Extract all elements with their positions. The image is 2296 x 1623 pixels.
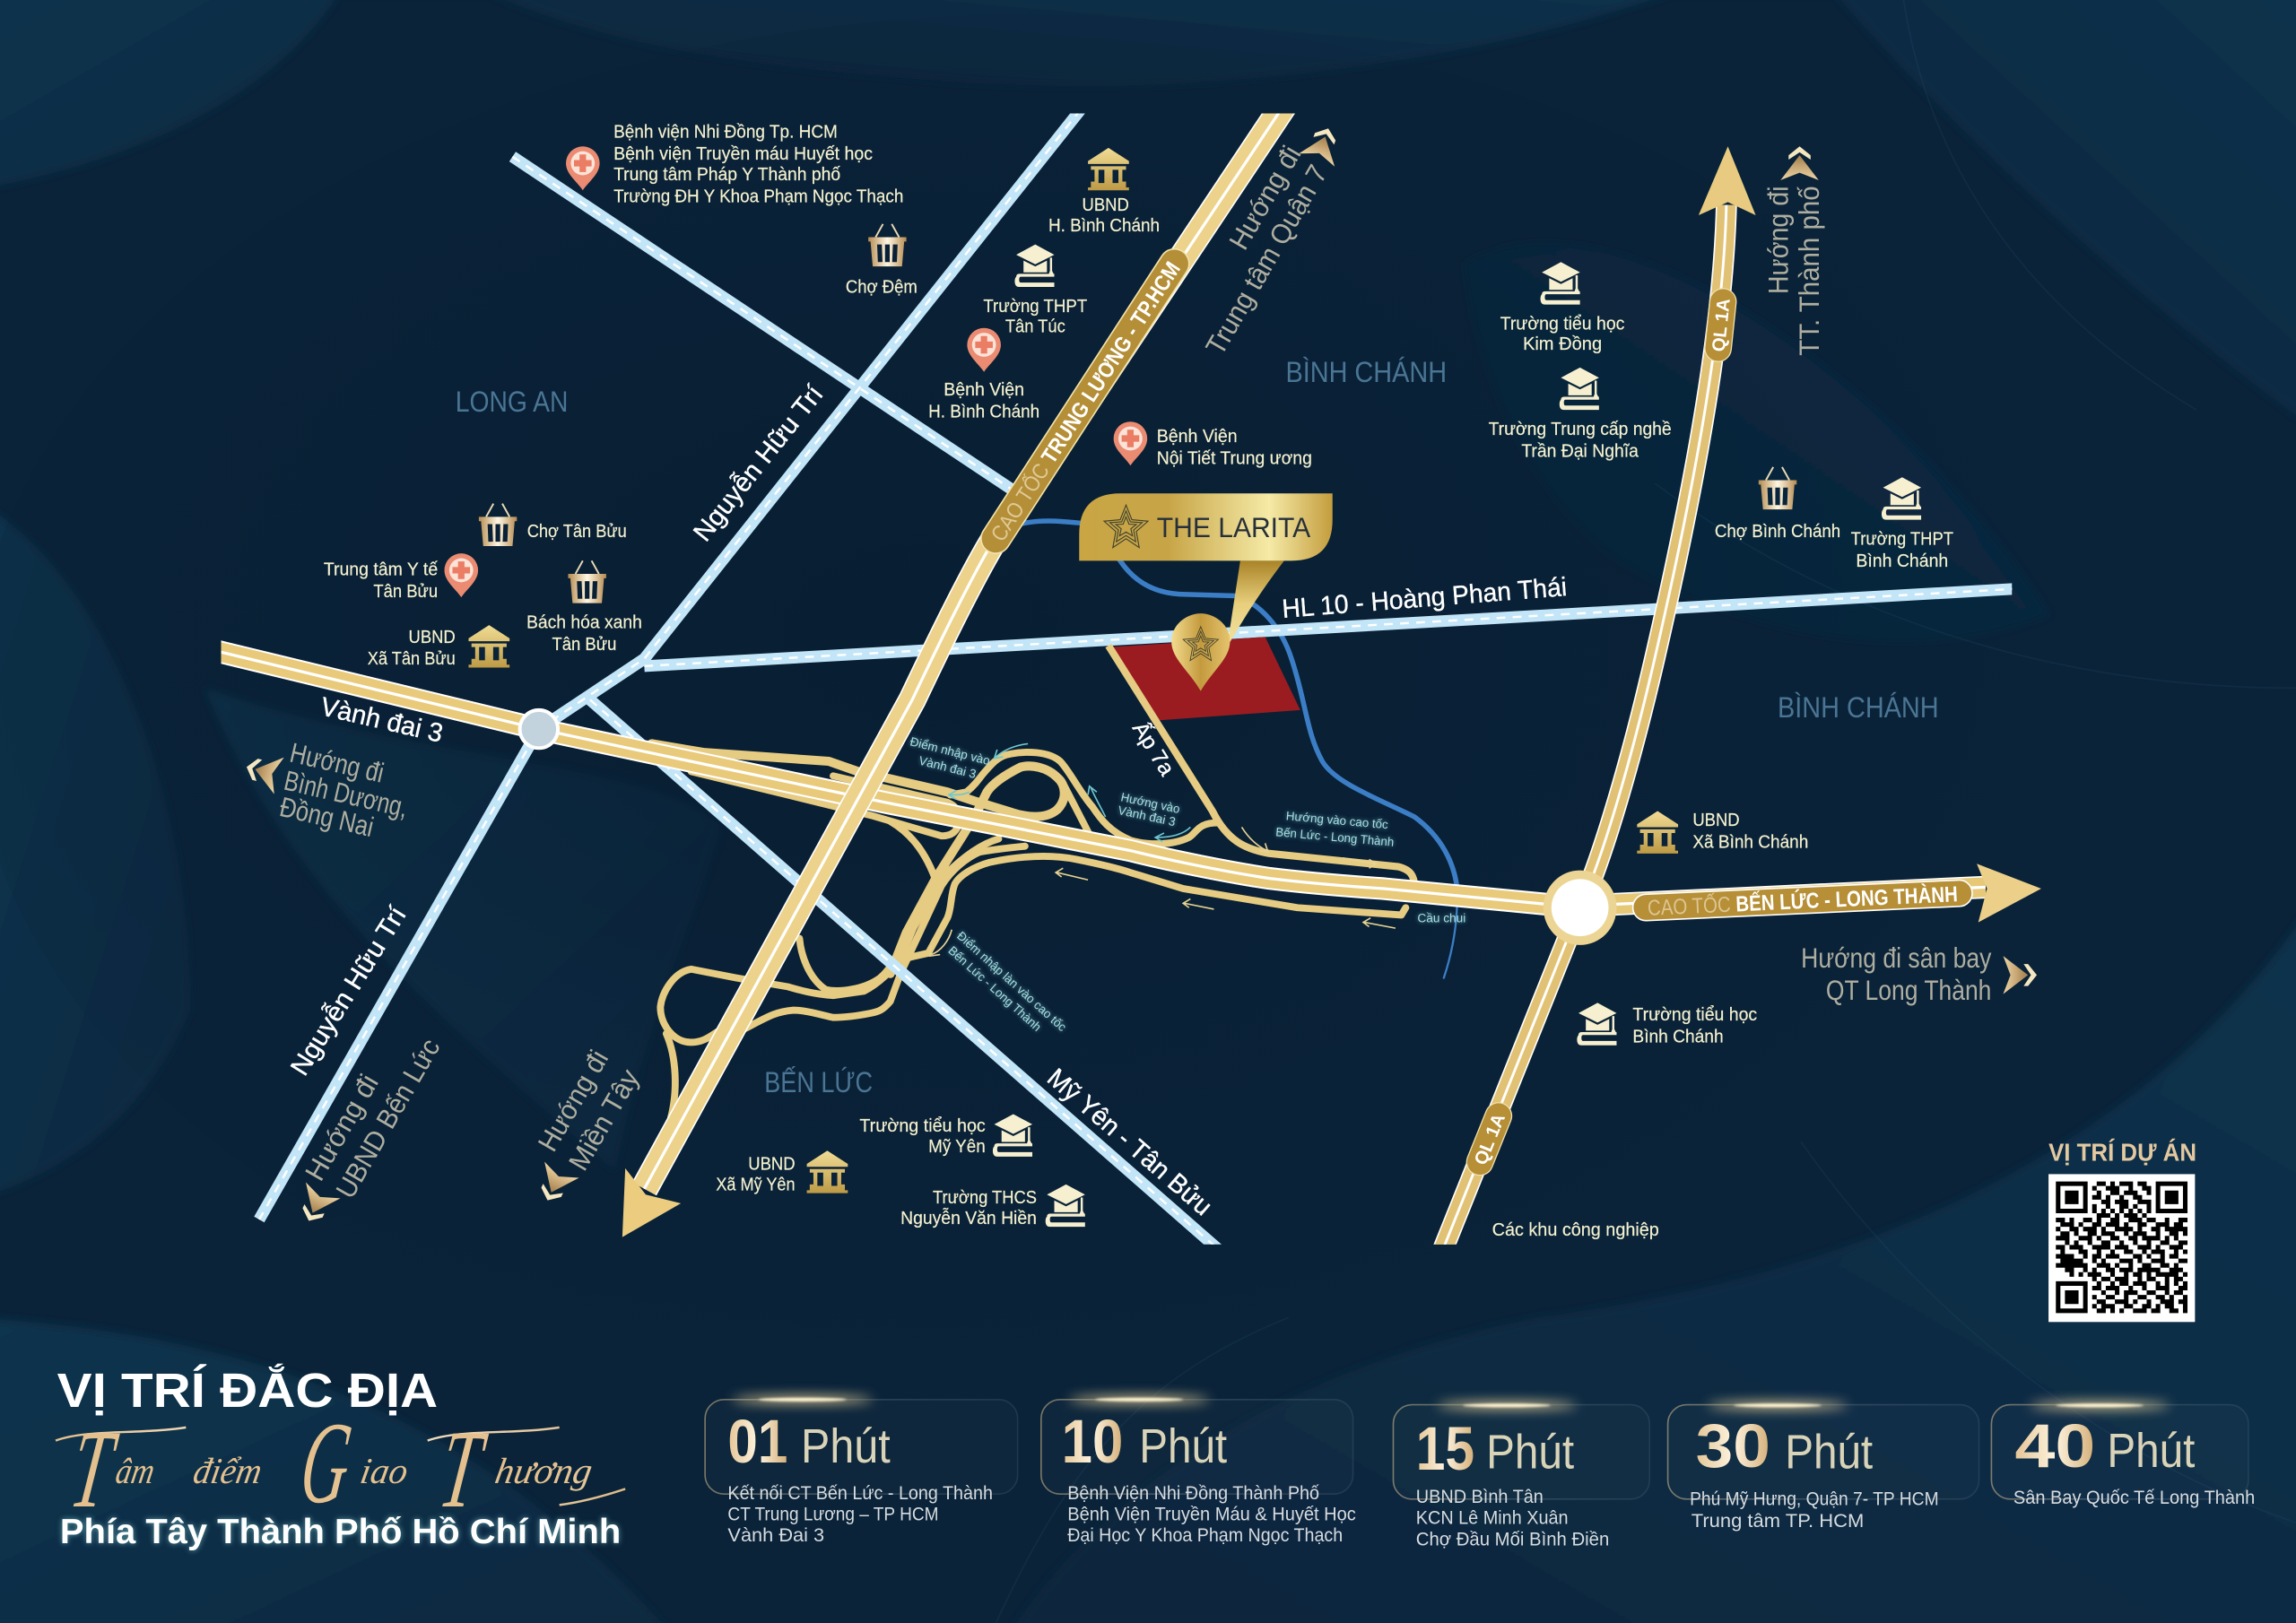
card: 10 Phút: Bệnh Viện Nhi Đồng Thành Phố [1067, 1483, 1319, 1504]
direction: UBND Bến Lức [291, 1033, 446, 1228]
script heading: Tâm điểm Giao Thương: hương [492, 1451, 596, 1491]
poi: Trường tiểu học Bình Chánh: Trường tiểu học [1632, 1005, 1757, 1025]
capsule: QL 1A bottom [1463, 1098, 1516, 1179]
poi: Bệnh Viện Nội Tiết Trung ương: Bệnh Viện [1157, 427, 1238, 447]
direction: sân bay QT Long Thành [1801, 942, 2037, 1006]
junction: Vành đai 3 and Nguyễn Hữu Trí [520, 710, 558, 748]
direction: TT. Thành phố: TT. Thành phố [1794, 186, 1825, 356]
highway: Bến Lức - Long Thành [1604, 887, 1986, 905]
flow arrows [930, 743, 1396, 956]
direction: Miền Tây [530, 1045, 646, 1209]
teal flow labels: Hướng vào cao tốc [1285, 809, 1389, 831]
direction: UBND Bến Lức: UBND Bến Lức [330, 1033, 446, 1203]
card: 10 Phút: Bệnh Viện Truyền Máu & Huyết Học [1067, 1505, 1356, 1525]
callout: The Larita: THE LARITA [1157, 512, 1311, 543]
poi: UBND Xã Bình Chánh [1637, 811, 1808, 854]
poi: Bệnh viện Nhi Đồng group [566, 122, 903, 206]
QR block: Vị trí dự án: VỊ TRÍ DỰ ÁN [2048, 1139, 2196, 1167]
location pin [1171, 613, 1230, 691]
poi: Bệnh viện Nhi Đồng group: Trung tâm Pháp Y Thành phố [613, 165, 840, 185]
direction: TT. Thành phố: Hướng đi [1762, 186, 1794, 294]
road labels: Ấp 7a [1127, 717, 1180, 780]
red project plot [1111, 637, 1300, 720]
poi: UBND Xã Mỹ Yên [716, 1150, 848, 1194]
card: 10 Phút: Phút [1139, 1419, 1227, 1473]
heading: Vị trí đắc địa: VỊ TRÍ ĐẮC ĐỊA [57, 1363, 438, 1418]
poi: Bệnh Viện Nội Tiết Trung ương: Nội Tiết Trung ương [1157, 449, 1312, 469]
card: 15 Phút: Chợ Đầu Mối Bình Điền [1416, 1529, 1609, 1549]
teal flow labels [909, 734, 1465, 1034]
direction: Trung tâm Quận 7: Hướng đi [1223, 141, 1307, 255]
poi: Trường THCS Nguyễn Văn Hiền: Trường THCS [933, 1188, 1037, 1208]
poi: Chợ Tân Bửu [479, 504, 627, 546]
poi: Bệnh Viện Nội Tiết Trung ương [1114, 421, 1312, 469]
poi: Trường tiểu học Mỹ Yên: Trường tiểu học [859, 1116, 986, 1136]
poi: Trường THPT Tân Túc [983, 245, 1087, 337]
region labels: BÌNH CHÁNH [1285, 355, 1447, 388]
highway: QL 1A [1438, 205, 1726, 1262]
poi: Trường THPT Bình Chánh: Bình Chánh [1856, 551, 1948, 571]
poi: Chợ Tân Bửu: Chợ Tân Bửu [527, 522, 627, 542]
card: 10 Phút: 10 [1062, 1407, 1123, 1476]
direction: Bình Dương, Đồng Nai [241, 737, 411, 843]
poi: Trường Trung cấp nghề Trần Đại Nghĩa [1489, 368, 1672, 461]
card: 30 Phút: Trung tâm TP. HCM [1692, 1511, 1864, 1532]
poi: UBND H. Bình Chánh: UBND [1083, 195, 1129, 215]
poi: Trung tâm Y tế Tân Bửu [324, 553, 478, 602]
capsule: QL 1A top [1703, 287, 1737, 363]
highway: Cao tốc Trung Lương - TP.HCM [644, 85, 1298, 1189]
teal flow labels: Cầu chui [1417, 912, 1465, 925]
poi: UBND Xã Tân Bửu: Xã Tân Bửu [368, 649, 456, 669]
teal flow labels: Vành đai 3 [918, 754, 978, 781]
poi: Bệnh viện Nhi Đồng group: Bệnh viện Nhi Đồng Tp. HCM [613, 122, 838, 142]
region labels [456, 355, 1939, 1098]
teal flow labels: Vành đai 3 [1117, 803, 1177, 829]
direction: TT. Thành phố [1762, 146, 1825, 356]
script heading: Tâm điểm Giao Thương: iao [357, 1450, 412, 1491]
poi: Trường THPT Tân Túc: Trường THPT [983, 297, 1087, 317]
script heading: Tâm điểm Giao Thương: T [64, 1408, 124, 1531]
script heading: Tâm điểm Giao Thương: âm [113, 1452, 158, 1492]
road labels: HL 10 - Hoàng Phan Thái [1281, 572, 1568, 624]
capsule: QL 1A bottom: QL 1A [1471, 1111, 1509, 1168]
card: 01 Phút: Phút [801, 1419, 891, 1473]
poi: Chợ Đệm: Chợ Đệm [846, 278, 918, 298]
poi: UBND Xã Mỹ Yên: Xã Mỹ Yên [716, 1175, 796, 1194]
card: 40 Phút: 40 [2015, 1411, 2095, 1480]
direction: Miền Tây: Miền Tây [562, 1063, 646, 1176]
card: 01 Phút: Kết nối CT Bến Lức - Long Thành [727, 1483, 993, 1504]
interchange ramps [652, 743, 1405, 1118]
poi: Trung tâm Y tế Tân Bửu: Trung tâm Y tế [324, 560, 439, 580]
poi: Trường THCS Nguyễn Văn Hiền [900, 1185, 1085, 1228]
road labels: Nguyễn Hữu Trí [688, 379, 830, 547]
capsule: QL 1A top: QL 1A [1709, 298, 1735, 352]
poi: Trường THPT Bình Chánh: Trường THPT [1851, 529, 1953, 549]
poi: UBND Xã Tân Bửu [368, 625, 509, 669]
poi: Trường tiểu học Mỹ Yên: Mỹ Yên [928, 1137, 986, 1157]
card: 40 Phút: Sân Bay Quốc Tế Long Thành [2013, 1488, 2255, 1508]
road labels: Mỹ Yên - Tân Bửu [1041, 1063, 1218, 1221]
teal flow labels: Hướng vào [1119, 790, 1181, 816]
arrowhead: Trung Lương [622, 1168, 681, 1237]
poi: Chợ Đệm [846, 224, 918, 298]
direction: Bình Dương, Đồng Nai: Hướng đi [287, 737, 387, 789]
teal flow labels: Bến Lức - Long Thành [1275, 825, 1395, 849]
poi: Bệnh viện Nhi Đồng group: Trường ĐH Y Khoa Phạm Ngọc Thạch [613, 187, 903, 206]
direction: Miền Tây: Hướng đi [532, 1045, 614, 1157]
road labels: Nguyễn Hữu Trí [285, 900, 413, 1081]
road: Áp 7a [1109, 646, 1414, 887]
road labels: Vành đai 3 [317, 691, 446, 749]
road labels [285, 379, 1568, 1221]
card: 30 Phút: Phú Mỹ Hưng, Quận 7- TP HCM [1690, 1488, 1939, 1509]
region labels: BẾN LỨC [764, 1065, 873, 1098]
card: 30 Phút: 30 [1696, 1411, 1770, 1480]
poi: Bệnh viện Nhi Đồng group: Bệnh viện Truyền máu Huyết học [613, 144, 873, 164]
poi: Trường THPT Tân Túc: Tân Túc [1005, 317, 1065, 337]
card: 01 Phút: Vành Đai 3 [727, 1525, 824, 1546]
region labels: LONG AN [456, 385, 568, 418]
poi: Trường tiểu học Mỹ Yên [859, 1114, 1032, 1157]
card: 40 Phút [1991, 1402, 2255, 1508]
card: 40 Phút: Phút [2107, 1424, 2195, 1478]
poi: UBND Xã Tân Bửu: UBND [409, 628, 456, 647]
script heading: Tâm điểm Giao Thương [56, 1397, 625, 1531]
arrowhead: Bến Lức - Long Thành [1977, 864, 2041, 923]
arrowhead: QL 1A [1699, 146, 1756, 215]
card: 01 Phút [705, 1396, 1018, 1546]
label: Các khu công nghiệp: Các khu công nghiệp [1492, 1220, 1659, 1240]
poi: Trường tiểu học Kim Đồng: Trường tiểu học [1500, 314, 1624, 334]
poi: Trường tiểu học Bình Chánh [1577, 1002, 1757, 1046]
callout: The Larita [1079, 493, 1333, 647]
region labels: BÌNH CHÁNH [1778, 690, 1939, 724]
blue roads [259, 97, 2021, 1254]
poi: UBND Xã Mỹ Yên: UBND [748, 1155, 796, 1175]
card: 15 Phút: KCN Lê Minh Xuân [1416, 1508, 1569, 1529]
junction: QL 1A and Bến Lức [1544, 871, 1616, 945]
card: 15 Phút: 15 [1416, 1414, 1474, 1483]
direction: UBND Bến Lức: Hướng đi [299, 1069, 385, 1186]
card: 15 Phút: Phút [1486, 1426, 1574, 1480]
teal flow labels: Bến Lức - Long Thành [945, 943, 1044, 1034]
direction: Trung tâm Quận 7: Trung tâm Quận 7 [1199, 160, 1334, 360]
QR block: Vị trí dự án [2048, 1139, 2196, 1322]
poi: Trung tâm Y tế Tân Bửu: Tân Bửu [373, 582, 438, 602]
poi: Trường Trung cấp nghề Trần Đại Nghĩa: Trần Đại Nghĩa [1521, 441, 1639, 461]
teal flow labels: Điểm nhập vào [909, 734, 992, 768]
poi: Trường THPT Bình Chánh [1851, 477, 1953, 571]
poi: UBND H. Bình Chánh [1048, 148, 1160, 236]
card: 30 Phút: Phút [1785, 1426, 1873, 1480]
poi: Bệnh Viện H. Bình Chánh [928, 328, 1039, 421]
capsule: Cao tốc Bến Lức - Long Thành: CAO TỐC BẾN LỨC - LONG THÀNH [1647, 881, 1958, 921]
poi: UBND Xã Bình Chánh: Xã Bình Chánh [1692, 832, 1808, 852]
capsule: Cao tốc Trung Lương - TP.HCM: CAO TỐC TRUNG LƯƠNG - TP.HCM [986, 257, 1186, 546]
poi: Bệnh Viện H. Bình Chánh: H. Bình Chánh [928, 402, 1039, 421]
poi: Trường tiểu học Bình Chánh: Bình Chánh [1632, 1027, 1724, 1046]
script heading: Tâm điểm Giao Thương: G [293, 1397, 359, 1527]
card: 10 Phút: Đại Học Y Khoa Phạm Ngọc Thạch [1067, 1525, 1343, 1546]
poi: Trường Trung cấp nghề Trần Đại Nghĩa: Trường Trung cấp nghề [1489, 420, 1672, 439]
direction: sân bay QT Long Thành: QT Long Thành [1826, 975, 1991, 1006]
highway: Vành đai 3 [213, 650, 1552, 905]
card: 10 Phút [1041, 1396, 1356, 1546]
card: 30 Phút [1668, 1402, 1979, 1532]
direction: Bình Dương, Đồng Nai: Bình Dương, [282, 765, 411, 823]
poi: Chợ Bình Chánh [1715, 467, 1840, 542]
subheading: Phía Tây Thành Phố Hồ Chí Minh: Phía Tây Thành Phố Hồ Chí Minh [60, 1513, 621, 1551]
direction: sân bay QT Long Thành: Hướng đi sân bay [1801, 942, 1992, 974]
poi: Chợ Bình Chánh: Chợ Bình Chánh [1715, 522, 1840, 542]
direction: Bình Dương, Đồng Nai: Đồng Nai [277, 791, 377, 843]
poi: Trường tiểu học Kim Đồng: Kim Đồng [1523, 334, 1602, 354]
poi: Bách hóa xanh Tân Bửu [526, 560, 642, 655]
script heading: Tâm điểm Giao Thương: T [433, 1408, 492, 1531]
river [1013, 521, 1457, 978]
card: 01 Phút: 01 [727, 1407, 787, 1476]
teal flow labels: Điểm nhập làn vào cao tốc [954, 929, 1069, 1034]
card: 15 Phút: UBND Bình Tân [1416, 1487, 1544, 1507]
poi: Bách hóa xanh Tân Bửu: Bách hóa xanh [526, 612, 642, 632]
card: 01 Phút: CT Trung Lương – TP HCM [727, 1505, 939, 1525]
script heading: Tâm điểm Giao Thương: điểm [190, 1450, 265, 1491]
poi: UBND Xã Bình Chánh: UBND [1692, 811, 1740, 830]
poi: Trường THCS Nguyễn Văn Hiền: Nguyễn Văn Hiền [900, 1208, 1037, 1228]
poi: UBND H. Bình Chánh: H. Bình Chánh [1048, 216, 1160, 236]
poi: Bệnh Viện H. Bình Chánh: Bệnh Viện [944, 380, 1024, 400]
poi: Trường tiểu học Kim Đồng [1500, 262, 1624, 354]
card: 15 Phút [1393, 1402, 1649, 1549]
title block [56, 1363, 625, 1551]
poi: Bách hóa xanh Tân Bửu: Tân Bửu [552, 635, 616, 655]
